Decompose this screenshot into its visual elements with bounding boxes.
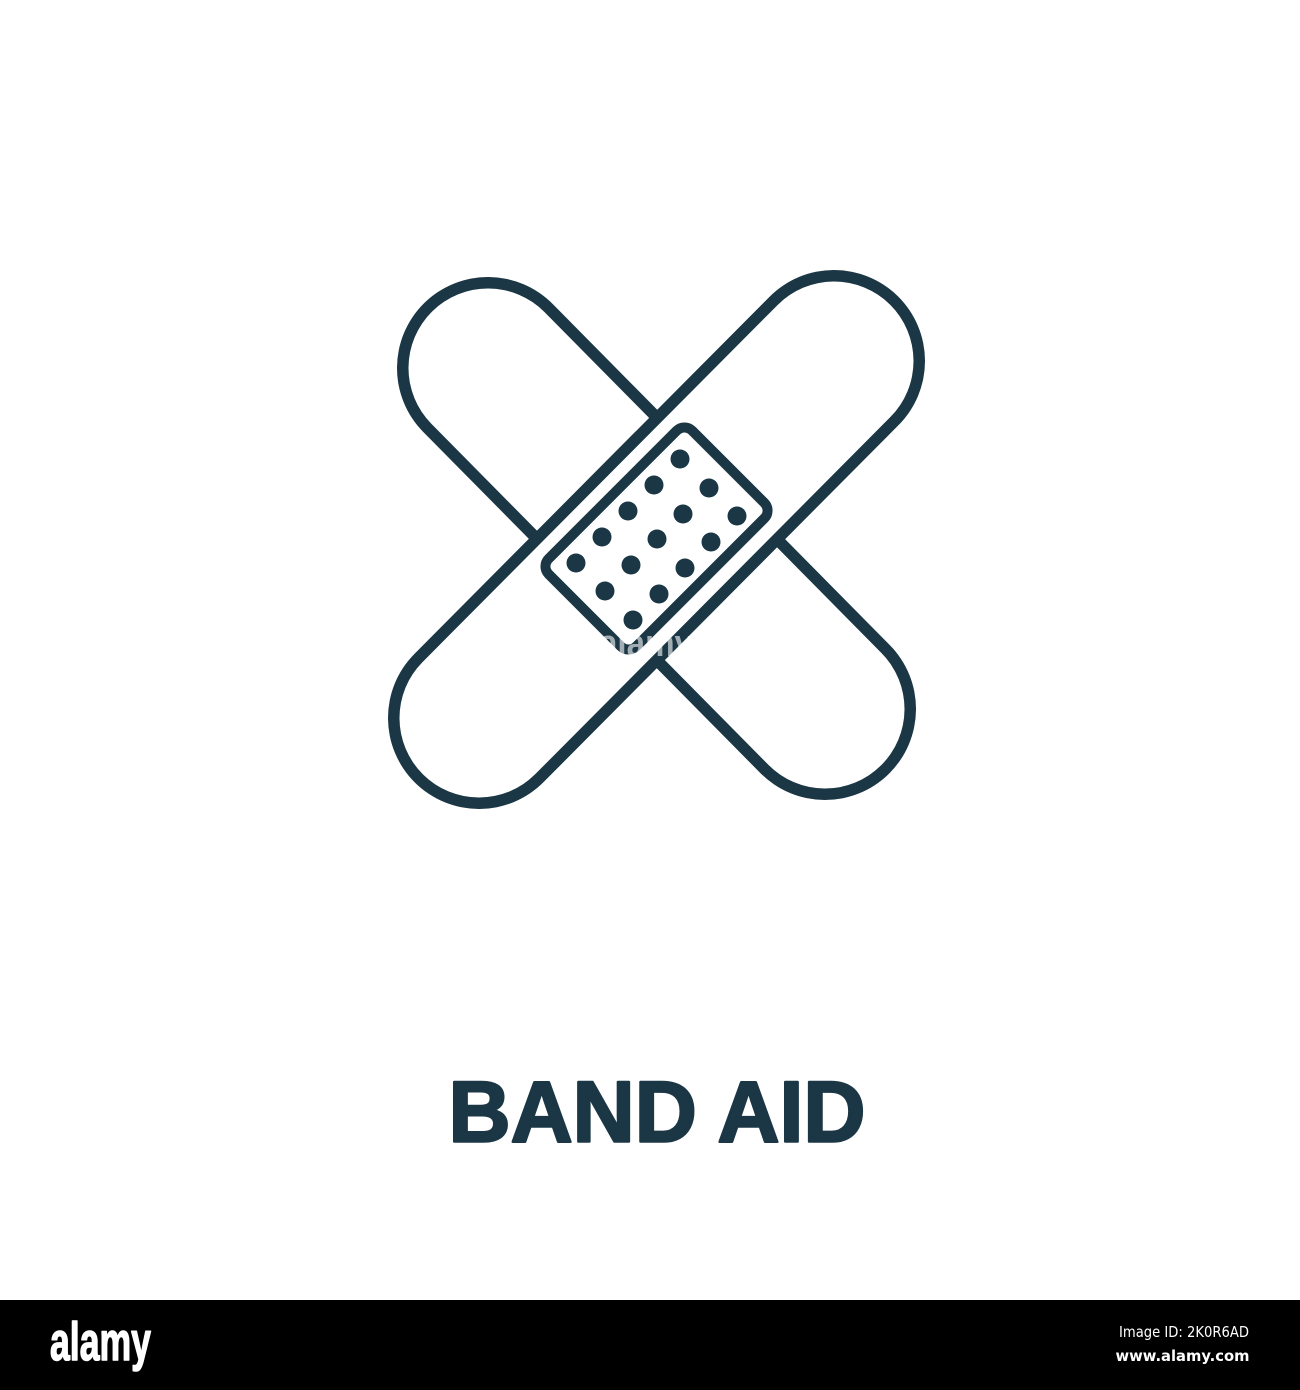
title: band aid: BAND AID (448, 1064, 866, 1160)
footer bar (0, 1300, 1300, 1390)
footer text: website: www.alamy.com (1116, 1347, 1250, 1365)
icon: crossed band aids (479, 361, 834, 718)
icon part: gauze pad dots (566, 450, 746, 630)
footer logo: alamy: alamy (50, 1312, 151, 1372)
footer text: image id: Image ID: 2K0R6AD (1119, 1324, 1249, 1341)
icon part: back bandage strip (488, 368, 825, 709)
watermark over icon: alamy (599, 623, 693, 665)
icon part: gauze pad (541, 423, 772, 654)
icon part: front bandage strip (479, 361, 834, 718)
